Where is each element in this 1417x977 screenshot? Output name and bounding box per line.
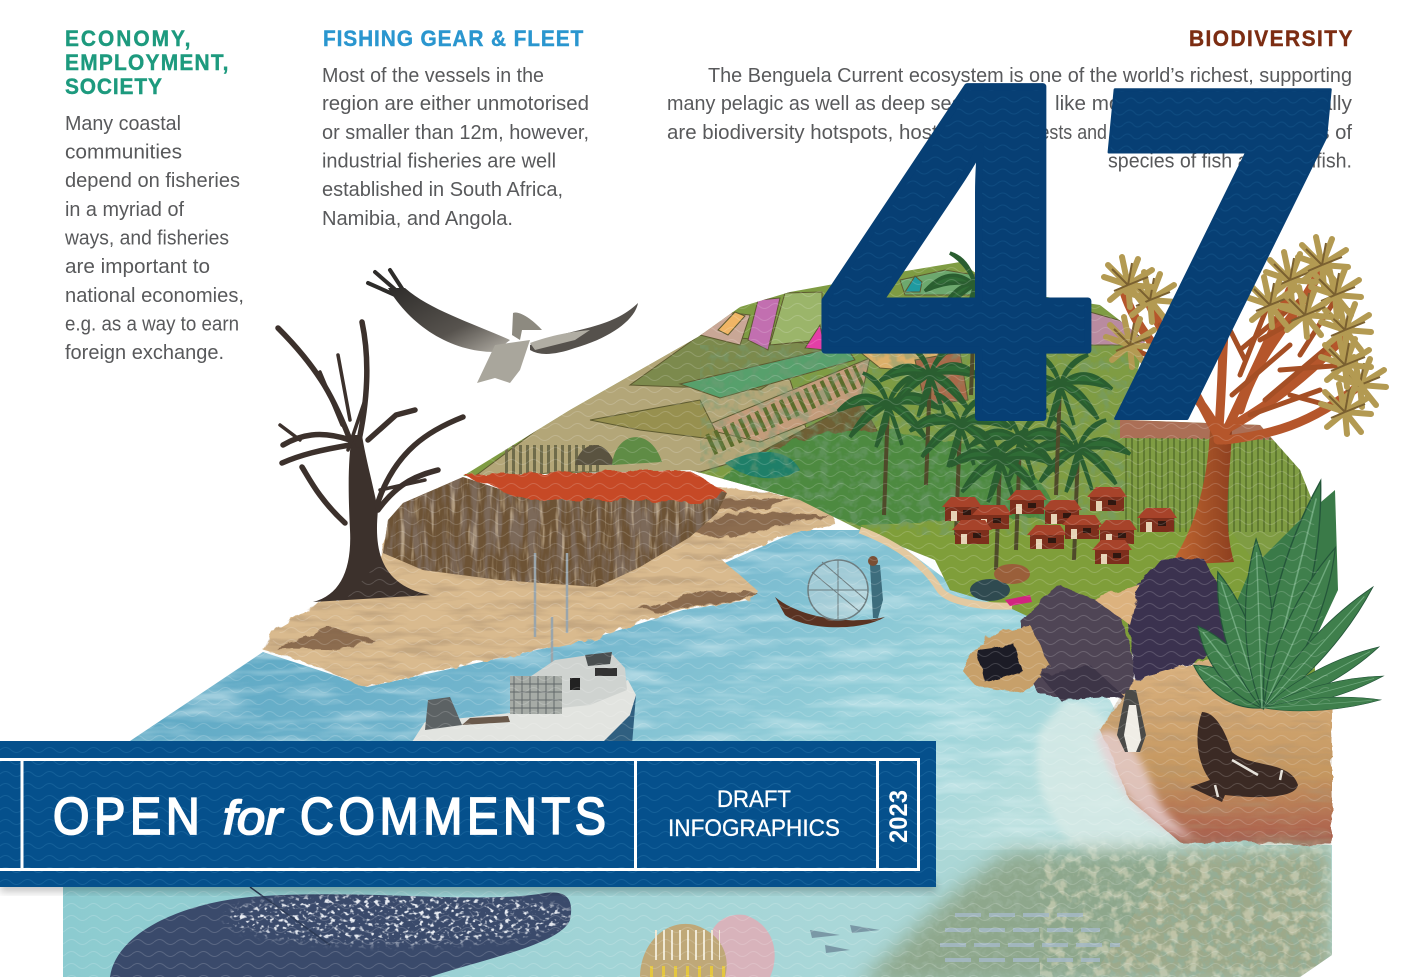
body text: economy: ways, and fisheries (64, 226, 229, 250)
banner year: 2023 (885, 790, 913, 843)
pink foam on the beach (1095, 731, 1195, 838)
pelican (368, 270, 638, 383)
whale (110, 885, 580, 977)
body text: economy: communities (65, 140, 182, 164)
panel: fishing gear and fleet (322, 27, 589, 230)
body text: biodiversity: coral forests and (975, 121, 1107, 144)
body text: biodiversity: many pelagic as well as deep sea species (667, 92, 1035, 115)
lower meadow (860, 520, 1315, 680)
illustration: Benguela coastal scene (0, 234, 1417, 977)
bare tree (278, 322, 463, 602)
body text: biodiversity: hundreds of (1245, 121, 1352, 144)
body text: biodiversity: like monkfish. (1055, 92, 1180, 115)
green hill with farmland (460, 260, 1320, 690)
body text: economy: Many coastal (65, 112, 181, 135)
banner background (0, 741, 936, 887)
body text: biodiversity: The Benguela Current ecosystem is one of the world’s richest, supporting (708, 64, 1352, 87)
penguin (1117, 690, 1146, 752)
mountain patches (700, 312, 750, 345)
field: olive south patch (590, 400, 720, 440)
lower sea background (63, 700, 1332, 977)
small fish (810, 925, 880, 953)
banner title: OPEN (53, 788, 200, 846)
heading: economy (65, 27, 228, 99)
agave plant (1187, 477, 1385, 719)
brown upper slope (1120, 420, 1274, 440)
banner title: COMMENTS (300, 788, 606, 846)
shore edge of the bay (860, 530, 1012, 606)
digit 7: 7 (1047, 0, 1370, 525)
panel: economy, employment, society (64, 27, 244, 364)
heading: fishing gear: FISHING GEAR & FLEET (323, 27, 583, 51)
palm trees (838, 253, 1130, 570)
foam along the rocky shore (1037, 700, 1200, 860)
bay water (130, 530, 1240, 850)
fisherman in canoe with net (775, 556, 885, 627)
field: olive terraces (630, 335, 830, 390)
leaf texture (700, 345, 1130, 535)
coral (640, 915, 775, 977)
heading: economy: SOCIETY (65, 75, 162, 99)
field: vineyard rows (505, 445, 599, 474)
fish and woman on the shore (970, 564, 1032, 606)
shrub and hut on the slope (575, 445, 615, 465)
right sandy beach (1100, 659, 1334, 846)
body text: economy: foreign exchange. (65, 341, 224, 364)
field: dark brown plot (759, 405, 878, 452)
panel: biodiversity (667, 27, 1353, 172)
schooling fish (940, 915, 1120, 960)
wave texture over illustration (63, 267, 1332, 977)
banner title (53, 788, 606, 846)
banner subtitle: DRAFT (717, 786, 791, 813)
heading: biodiversity: BIODIVERSITY (1189, 27, 1352, 51)
banner title: for (223, 791, 285, 844)
striped green field (1125, 438, 1310, 532)
heading: economy: ECONOMY, (65, 27, 190, 51)
body text: fishing gear: or smaller than 12m, however, (322, 121, 589, 144)
banner: open for comments (0, 741, 936, 892)
water streaks (130, 535, 1114, 848)
fishing boat (410, 553, 636, 745)
left sandy shore (260, 488, 840, 690)
body text: biodiversity: species of fish and shellfish. (1108, 150, 1352, 172)
body text: fishing gear: industrial fisheries are well (322, 150, 556, 172)
body text: biodiversity: are biodiversity hotspots, hosting (667, 121, 965, 144)
body text: economy: national economies, (65, 284, 244, 307)
body text: fishing gear: region are either unmotorised (322, 92, 589, 115)
seagrass meadow (840, 830, 1340, 977)
body text: fishing gear: Namibia, and Angola. (322, 207, 513, 230)
dark boulders (962, 558, 1238, 700)
banner subtitle: INFOGRAPHICS (668, 815, 840, 842)
dark shoreline rocks (275, 498, 830, 650)
field: green checker (680, 345, 855, 398)
fur seal (1190, 712, 1298, 802)
field: tan slopes (470, 332, 810, 480)
body text: biodiversity: Reefs especially (1200, 92, 1353, 115)
layered cliff (380, 470, 730, 590)
body text: economy: depend on fisheries (65, 169, 240, 192)
quiver tree (1104, 234, 1386, 565)
red laterite cliff top (463, 471, 727, 502)
village huts (942, 487, 1177, 564)
banner shadow (0, 880, 936, 892)
field: striped terrace (710, 375, 860, 445)
field group with drawn outlines (470, 270, 1148, 480)
banner frame (0, 760, 918, 870)
body text: economy: e.g. as a way to earn (65, 312, 239, 336)
body text: economy: in a myriad of (65, 198, 184, 221)
dark vegetation (720, 430, 1060, 526)
heading: economy: EMPLOYMENT, (65, 51, 228, 75)
body text: fishing gear: Most of the vessels in the (322, 64, 544, 87)
field: pink plots (700, 358, 870, 442)
body text: economy: are important to (65, 255, 210, 278)
body text: fishing gear: established in South Africa, (322, 178, 563, 201)
teal shrub (725, 452, 800, 478)
big number 47 (818, 0, 1370, 525)
